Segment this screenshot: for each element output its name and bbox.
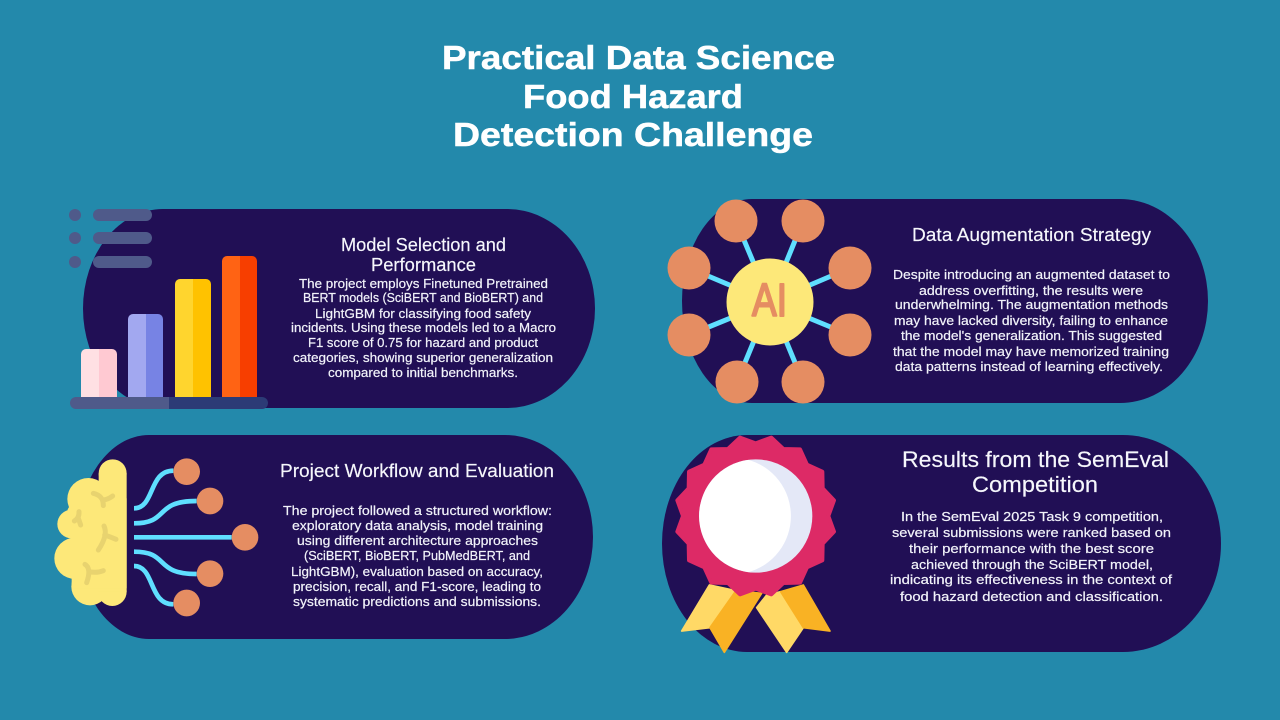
heading: model selection: Performance <box>371 255 476 275</box>
heading: project workflow: Project Workflow and Evaluation <box>280 461 554 481</box>
heading: SemEval results <box>902 447 1169 497</box>
panel: results from the SemEval competition <box>662 435 1221 652</box>
text block: project workflow: precision, recall, and F1-score, leading to <box>293 579 541 594</box>
icon: AI network: AI <box>752 274 787 326</box>
text block: model selection: BERT models (SciBERT and BioBERT) and <box>303 290 543 305</box>
text block: SemEval results: several submissions were ranked based on <box>892 525 1171 540</box>
text block: SemEval results: food hazard detection and classification. <box>900 589 1163 604</box>
title: Food Hazard <box>523 78 743 115</box>
text block: project workflow <box>283 503 552 609</box>
title: Detection Challenge <box>453 116 813 153</box>
text block: project workflow: exploratory data analysis, model training <box>292 518 543 533</box>
text block: model selection: LightGBM for classifying food safety <box>315 306 532 321</box>
text block: data augmentation: data patterns instead of learning effectively. <box>895 359 1163 374</box>
icon: award ribbon <box>677 438 834 652</box>
heading: model selection <box>341 235 506 275</box>
text block: data augmentation <box>893 267 1170 374</box>
heading: SemEval results: Results from the SemEval <box>902 447 1169 472</box>
icon: bar chart <box>69 209 268 409</box>
icon: AI network <box>668 200 872 404</box>
text block: SemEval results <box>890 509 1172 604</box>
text block: data augmentation: the model's generalization. This suggested <box>901 328 1162 343</box>
text block: data augmentation: Despite introducing an augmented dataset to <box>893 267 1170 282</box>
text block: model selection <box>291 276 556 380</box>
panel: data augmentation strategy <box>668 199 1208 404</box>
heading: model selection: Model Selection and <box>341 235 506 255</box>
text block: project workflow: using different architecture approaches <box>297 533 539 548</box>
text block: SemEval results: their performance with the best score <box>909 541 1154 556</box>
text block: model selection: incidents. Using these models led to a Macro <box>291 320 556 335</box>
panel: project workflow and evaluation <box>54 435 593 639</box>
text block: SemEval results: In the SemEval 2025 Task 9 competition, <box>901 509 1163 524</box>
heading: SemEval results: Competition <box>972 472 1098 497</box>
text block: model selection: compared to initial benchmarks. <box>328 365 518 380</box>
text block: project workflow: systematic predictions and submissions. <box>293 594 541 609</box>
text block: data augmentation: address overfitting, the results were <box>919 283 1143 298</box>
text block: SemEval results: achieved through the SciBERT model, <box>911 557 1153 572</box>
text block: data augmentation: underwhelming. The augmentation methods <box>895 297 1169 312</box>
text block: project workflow: LightGBM), evaluation based on accuracy, <box>291 564 543 579</box>
text block: project workflow: (SciBERT, BioBERT, PubMedBERT, and <box>304 548 530 563</box>
title: Practical Data Science <box>442 39 835 76</box>
text block: model selection: F1 score of 0.75 for hazard and product <box>308 335 538 350</box>
text block: data augmentation: that the model may have memorized training <box>893 344 1169 359</box>
text block: project workflow: The project followed a structured workflow: <box>283 503 552 518</box>
panel: model selection and performance <box>69 209 595 409</box>
text block: model selection: categories, showing superior generalization <box>293 350 553 365</box>
title <box>442 39 835 153</box>
icon: brain circuit <box>54 458 258 616</box>
text block: model selection: The project employs Finetuned Pretrained <box>299 276 548 291</box>
heading: data augmentation: Data Augmentation Strategy <box>912 225 1151 245</box>
text block: data augmentation: may have lacked diversity, failing to enhance <box>894 313 1168 328</box>
text block: SemEval results: indicating its effectiveness in the context of <box>890 572 1172 587</box>
